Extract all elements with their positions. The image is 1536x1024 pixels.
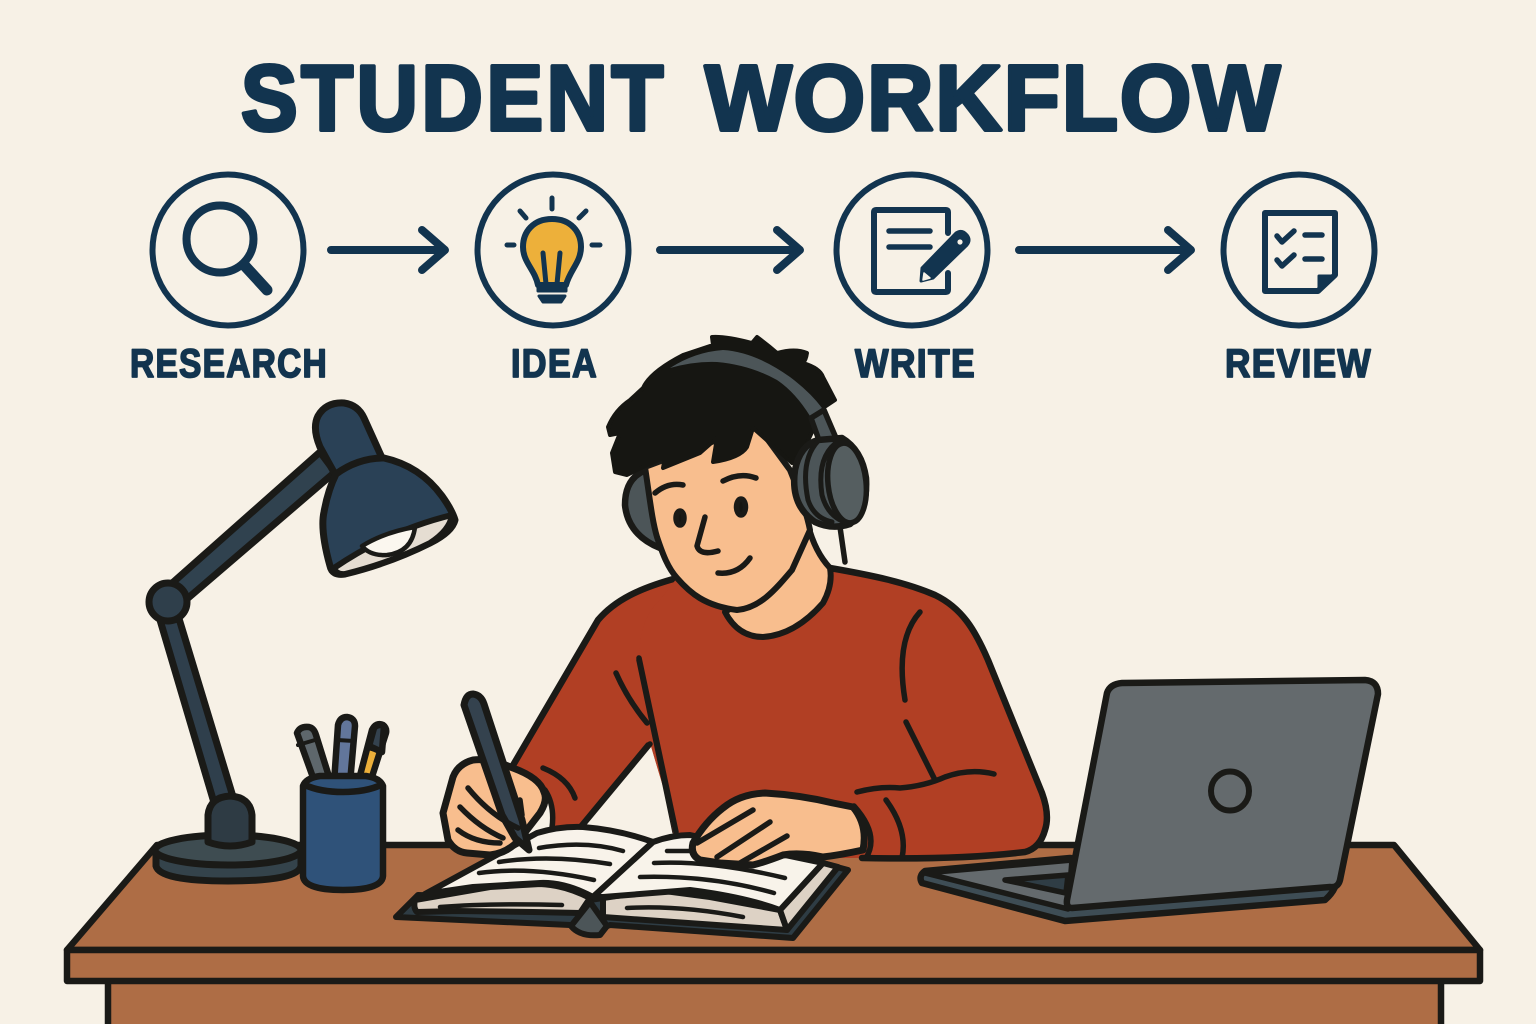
fingers — [697, 810, 787, 863]
right page — [593, 835, 823, 910]
step: write: WRITE — [855, 342, 976, 386]
title: WORKFLOW — [705, 46, 1282, 150]
page edge: right — [603, 890, 787, 930]
laptop logo — [1211, 772, 1249, 810]
lamp shade — [323, 458, 455, 574]
lamp base — [156, 850, 301, 881]
book cover — [396, 863, 848, 938]
headphone band — [670, 350, 822, 416]
hair — [608, 337, 835, 475]
icon: magnifying glass — [186, 206, 267, 290]
arrow: write to review — [1019, 230, 1191, 270]
sweater left arm — [510, 578, 780, 833]
headphone cord — [840, 527, 845, 562]
sweater torso — [640, 568, 1047, 858]
laptop — [921, 680, 1378, 921]
book spine — [571, 902, 607, 935]
arrow: idea to write — [660, 230, 800, 270]
lamp shade cap — [315, 403, 383, 476]
cup body — [303, 776, 383, 890]
lower arm — [160, 612, 234, 806]
neck — [725, 525, 831, 637]
title — [241, 46, 1282, 150]
step: review — [1224, 174, 1374, 386]
gap under arm — [582, 744, 675, 826]
face — [645, 425, 810, 610]
open book — [396, 827, 848, 938]
right headphone cup — [794, 438, 870, 527]
workflow steps row — [130, 174, 1374, 386]
desk top — [67, 845, 1480, 950]
lamp joint — [149, 583, 187, 621]
arrow: research to idea — [331, 230, 445, 270]
upper arm — [170, 452, 335, 605]
desk leg panel — [108, 980, 1441, 1024]
step: research — [130, 174, 328, 386]
icon: light bulb — [507, 198, 600, 302]
right hand — [692, 793, 864, 865]
step: idea: IDEA — [511, 342, 598, 386]
left hand with pen — [443, 694, 545, 855]
step: review: REVIEW — [1225, 342, 1372, 386]
lamp neck — [208, 796, 252, 846]
hand shape — [692, 793, 864, 865]
icon: document and pencil — [874, 210, 969, 292]
lamp opening — [334, 515, 452, 574]
keyboard — [1005, 875, 1068, 893]
desk — [67, 845, 1480, 1024]
page edge: left — [414, 884, 590, 913]
face features — [655, 476, 756, 573]
left headphone cup — [625, 470, 668, 548]
step: write — [836, 174, 988, 386]
icon: checklist — [1265, 213, 1335, 291]
lamp bulb — [362, 527, 415, 555]
pens in cup — [297, 717, 386, 783]
pen — [464, 694, 529, 850]
title: STUDENT — [241, 46, 667, 150]
laptop lid — [1067, 680, 1378, 908]
student — [510, 337, 1047, 858]
text lines — [440, 845, 785, 917]
fingers — [458, 788, 522, 843]
desk front edge — [67, 950, 1480, 981]
step: idea — [478, 174, 628, 386]
laptop base — [921, 858, 1336, 921]
step: research: RESEARCH — [130, 342, 328, 386]
left page — [425, 827, 653, 897]
hand — [443, 760, 545, 855]
pen holder — [297, 717, 386, 890]
desk lamp — [149, 403, 455, 881]
